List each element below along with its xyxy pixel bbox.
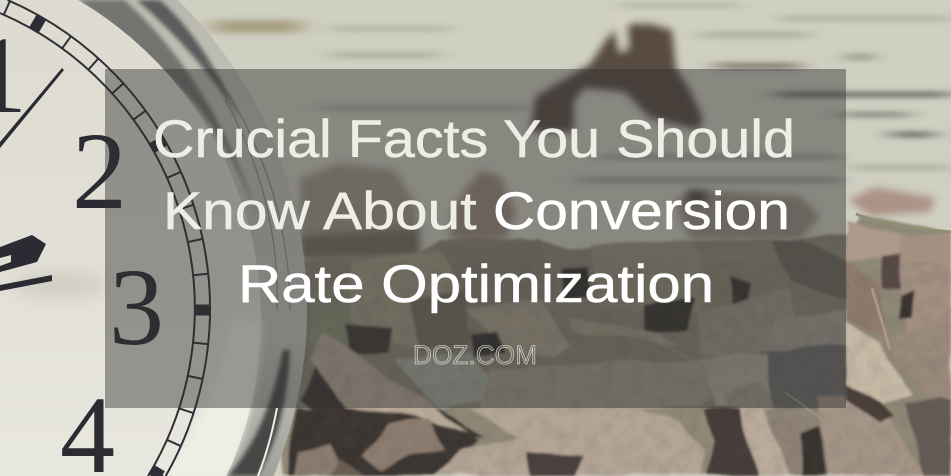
leaf texture (298, 262, 951, 476)
right mottled leaf (817, 394, 925, 476)
tan leaf fragments bottom left (292, 420, 445, 476)
photo: foreground dry leaves (280, 215, 951, 476)
case shading: grooves (205, 60, 290, 310)
numerals: 2 (72, 110, 127, 232)
dark bottom left (285, 408, 480, 476)
case highlight (258, 408, 277, 476)
translucent panel (105, 69, 846, 408)
title (153, 110, 795, 314)
hand shadow (12, 271, 108, 299)
leaf stems (617, 214, 951, 440)
case shading: lower dark band (228, 350, 290, 476)
case shading: upper dark bands (78, 0, 262, 230)
brand: DOZ.COM: DOZ.COM (413, 340, 537, 370)
pale stalk (738, 408, 800, 476)
clock (0, 0, 307, 476)
title line 1: Crucial Facts You Should (153, 110, 795, 169)
numerals (0, 14, 164, 476)
numerals: 3 (109, 246, 164, 368)
clock hands (0, 68, 64, 291)
clock dial (0, 0, 261, 476)
minute track (0, 0, 210, 476)
leaves under the panel, upper row (310, 240, 846, 408)
photo: blurred distant leaves (300, 8, 935, 260)
dial bright rim (165, 320, 262, 476)
leaves right of panel (846, 222, 951, 425)
title line 3: Rate Optimization (238, 255, 714, 314)
clock case (0, 0, 307, 476)
big pale leaf bottom centre (433, 408, 705, 476)
leaves under the panel, lower row (300, 330, 775, 440)
title line 2: Know About Conversion (163, 182, 790, 241)
